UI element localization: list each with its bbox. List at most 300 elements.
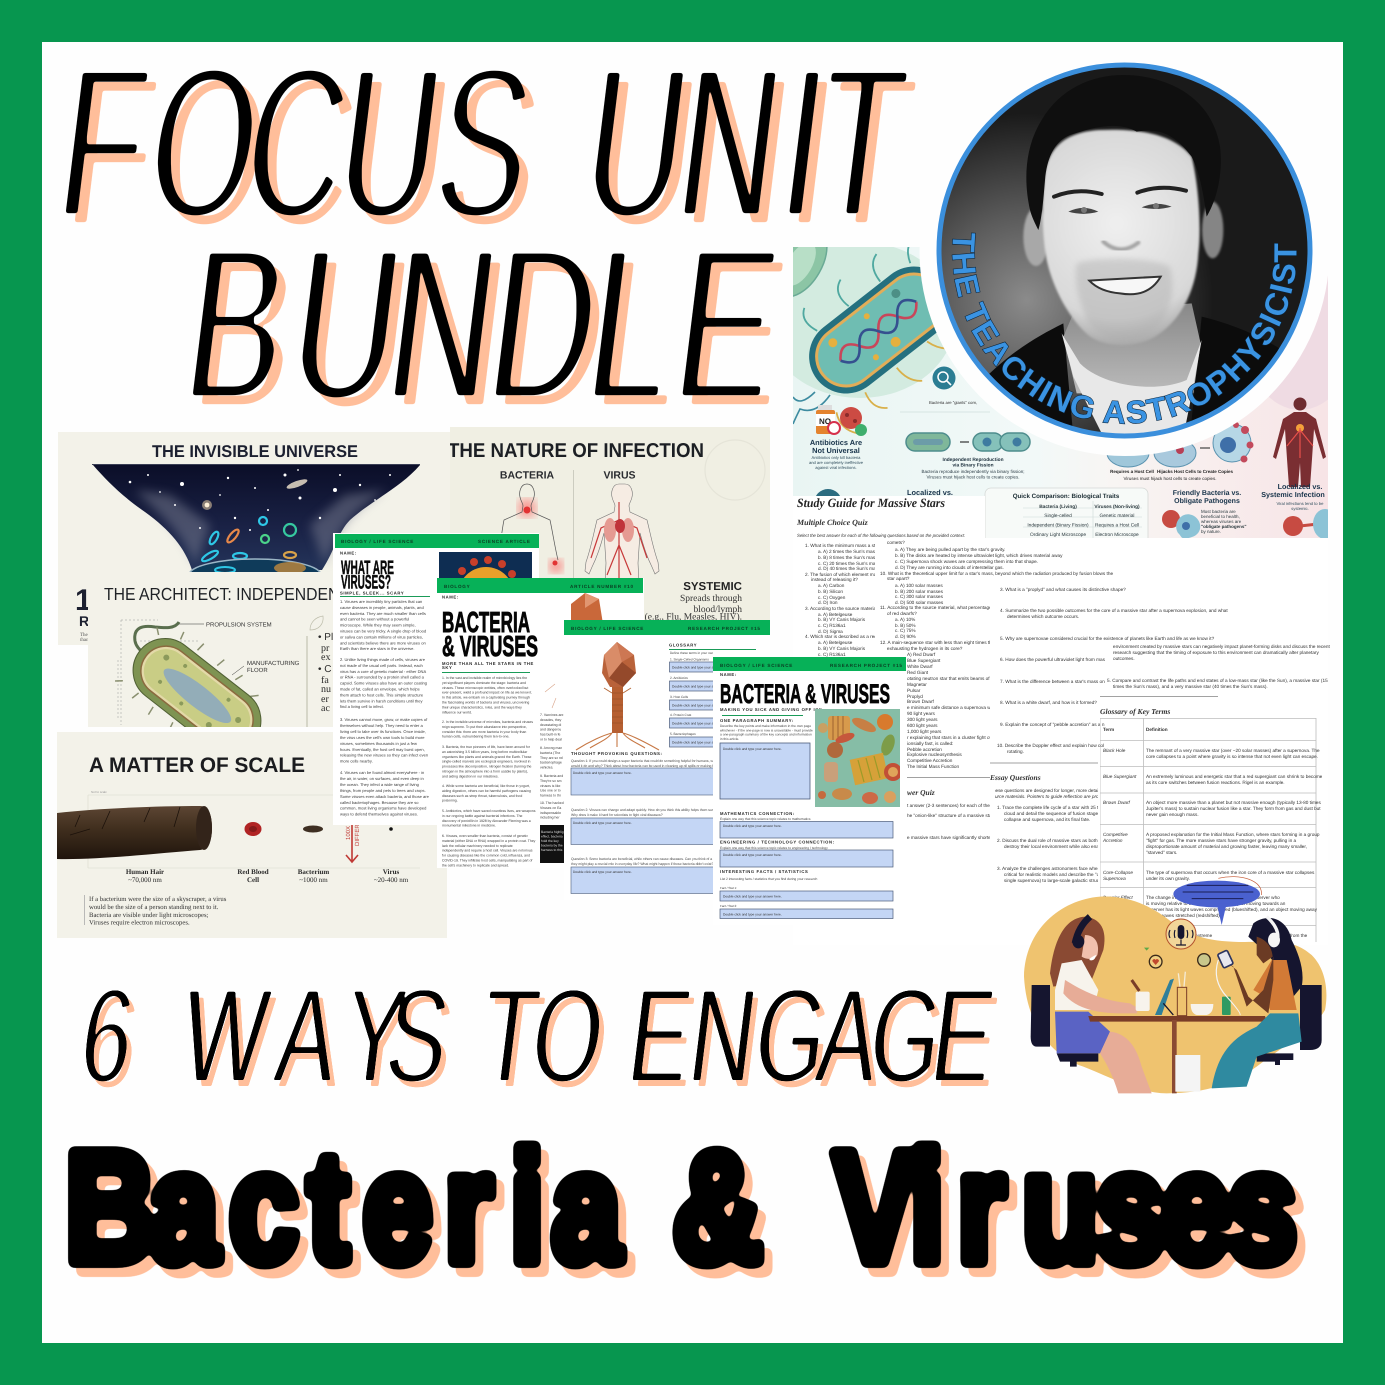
icon: small background bacterium [793, 247, 828, 297]
green header: BIOLOGY [444, 584, 470, 589]
quiz column 2 continued: c. C) 75% [895, 628, 916, 633]
note: would be the size of a person standing next to it. [89, 904, 219, 911]
quiz column 2 continued: r explaining that stars in a cluster fight ove [907, 735, 995, 740]
article body: human cells, outnumbering them ten-to-one. [442, 735, 509, 739]
quiz column 2 continued: 11. According to the source material, what percentage of [880, 605, 998, 610]
green header [564, 620, 770, 635]
article body: lack the cellular machinery needed to replicate [442, 844, 513, 848]
quiz column 1: d. D) 40 times the Sun's mass [818, 566, 881, 571]
glossary table: The change in a wave's frequency in relation to an observer who [1146, 895, 1280, 900]
article body: 2. In the invisible universe of microbes, bacteria and viruses [442, 720, 533, 724]
green header: BIOLOGY / LIFE SCIENCE [571, 626, 644, 631]
article body: 1. Viruses are incredibly tiny particles that can [340, 599, 422, 604]
quiz column 1: a. A) 2 times the Sun's mass [818, 549, 878, 554]
slide title: THE ARCHITECT: INDEPENDENT [104, 584, 349, 604]
poster text: reproduction: Independent Reproduction [942, 457, 1004, 463]
math section: Double click and type your answer here. [723, 824, 782, 828]
glossary answer boxes: Double click and type your answer here. [672, 684, 731, 688]
label: virus: Virus [383, 868, 400, 876]
eyes [1068, 203, 1172, 214]
glossary table: The type of supernova that occurs when the iron core of a massive star collapses [1146, 870, 1315, 875]
illustration: bacterium cell [115, 627, 262, 727]
article right column: indispensable [540, 811, 561, 815]
ears [1023, 207, 1049, 266]
icon: leaf [310, 616, 323, 630]
article right column: bacteria (The [540, 751, 560, 755]
bullets: ex [321, 652, 330, 663]
article body: their unique characteristics, roles, and the ways they [442, 705, 522, 709]
table: quick comparison: Ordinary Light Microscope [1030, 532, 1086, 538]
quiz column 1: 2. The fusion of which element mark [805, 572, 881, 577]
essay questions heading: Essay Questions [989, 773, 1041, 782]
poster text: host cell [1110, 469, 1234, 481]
nose [1103, 242, 1138, 249]
article body: them attach to host cells. This simple structure [340, 692, 424, 697]
glossary table [1100, 718, 1323, 945]
glossary answer boxes: Double click and type your answer here. [672, 722, 731, 726]
article body: find a living cell to infect. [340, 704, 384, 709]
table: quick comparison: Quick Comparison: Biological Traits [1013, 493, 1120, 500]
article right column: and dangerou [540, 728, 561, 732]
portrait badge: THE TEACHING ASTROPHYSICIST [952, 232, 1297, 424]
glossary table: core collapses to a point where gravity is so intense that not even light can escape. [1146, 754, 1318, 759]
thought provoking questions: Question 2: Viruses can change and adapt quickly. How do you think this ability helps them survive? [571, 808, 721, 812]
glossary table: A proposed explanation for the Initial Mass Function, where stars forming in a group [1146, 832, 1320, 837]
icon: teal circle [816, 489, 840, 496]
thought provoking questions: Double click and type your answer here. [573, 821, 632, 825]
engineering section: ENGINEERING / TECHNOLOGY CONNECTION: [720, 840, 835, 844]
tablet [1155, 979, 1174, 1015]
article right column: bacteriophage [540, 761, 562, 765]
icon: magnifier [932, 366, 956, 390]
glossary table: Competitive [1103, 832, 1128, 837]
icon: antibiotics bottle and virus [816, 405, 867, 436]
article right column: including her [540, 816, 560, 820]
poster heading: localized vs systemic: Systemic Infection [1261, 490, 1325, 499]
panel: bacteria vs viruses infographic poster: by nature. [1201, 529, 1221, 534]
glossary heading: GLOSSARY [669, 642, 697, 648]
quiz column 2 continued: b. B) 50% [895, 623, 916, 628]
quiz column 2 continued: he "onion-like" structure of a massive star [907, 813, 994, 818]
article body: releasing the new viruses so they can infect even [340, 753, 428, 758]
illustration: virus dot [389, 827, 393, 831]
article right column: 8. Among man [540, 746, 562, 750]
bag [1175, 1055, 1200, 1092]
panel: bacteria vs viruses infographic poster: Viruses must hijack host cells to create copies. [927, 474, 1019, 480]
green header: ARTICLE NUMBER #10 [570, 584, 634, 589]
article body: things, from people and pets to trees and crops. [340, 788, 426, 793]
article title: WHAT ARE [341, 557, 394, 579]
short answer questions: 5. Why are supernovae considered crucial for the existence of planets like Earth and life as we know it? [1000, 636, 1215, 641]
quiz column 2: 10. What is the theoretical upper limit for a star's mass, beyond which the radiation produced by fusion blows the [880, 571, 1113, 576]
article body: the virus uses the cell's own tools to build more [340, 735, 425, 740]
short answer questions clipped: 6. How does the powerful ultraviolet light from mas [1000, 657, 1106, 662]
face [1043, 130, 1200, 345]
glossary table: Core-Collapse [1103, 870, 1133, 875]
article subtitle: SKY [442, 665, 452, 670]
slide decoration [705, 440, 765, 500]
label: manufacturing: MANUFACTURING [247, 660, 300, 667]
label: red blood cell: Red Blood [237, 868, 269, 876]
glossary table: A supernova where the extreme [1146, 933, 1213, 938]
quiz column 2 continued: Explosive nucleosynthesis [907, 752, 962, 757]
short answer questions [1000, 587, 1228, 641]
illustration: cosmic funnel [93, 465, 420, 570]
title: Bacteria & Viruses: Bacteria & Viruses [65, 1120, 1298, 1296]
article body: common, most living organisms have developed [340, 806, 426, 811]
title: FOCUS UNIT: FOCUS UNIT [48, 22, 916, 263]
label: bacterium: ~1000 nm [299, 876, 328, 884]
essay questions: 2. Discuss the dual role of massive stars as both d [997, 838, 1102, 843]
green header [713, 657, 906, 671]
dark callout box [540, 825, 564, 863]
quiz column 2 continued: exhausting the hydrogen in its core? [887, 646, 963, 651]
label: manufacturing: FLOOR [247, 667, 268, 674]
label: red blood cell: Cell [247, 876, 259, 884]
article body: discovery of penicillin in 1928 by Alexander Fleming was a [442, 819, 531, 823]
chairs [1031, 985, 1050, 1047]
portrait photo [940, 67, 1308, 437]
poster heading: localized vs systemic: Localized vs. [1278, 482, 1322, 491]
thought provoking questions: THOUGHT PROVOKING QUESTIONS: [571, 751, 662, 756]
eyebrows [1054, 188, 1186, 197]
math section: Explain one way that this science topic relates to mathematics [720, 817, 811, 821]
article body: living cell to take over its functions. Once inside, [340, 729, 426, 734]
article body: single-celled marvels are ecological engineers, involved in [442, 760, 531, 764]
illustration: petri dish [189, 558, 321, 572]
label: bacterium: Bacterium [298, 868, 329, 876]
nebula edge clouds [135, 490, 385, 565]
short answer questions: 3. What is a "proplyd" and what causes its distinctive shape? [1000, 587, 1126, 592]
podcast illustration [1024, 877, 1326, 1093]
facts section: Fact / Stat 1: [720, 886, 737, 890]
icon: virus and cell [1283, 509, 1328, 538]
glossary table: "starved" stars. [1146, 850, 1177, 855]
article body: viruses. These microscopic entities, often overlooked but [442, 686, 528, 690]
jacket [970, 317, 1287, 437]
article right column: devastating di [540, 723, 561, 727]
quiz column 2 continued: 1,000 light years [907, 729, 942, 734]
bullets: pr [321, 643, 330, 654]
article body: Earth than there are stars in the universe. [340, 646, 414, 651]
quiz column 2 continued: Competitive Accretion [907, 758, 953, 763]
callout: systemic: blood/lymph [693, 605, 742, 615]
panel: bacteria vs viruses infographic poster: Bacteria are "giants" com, [929, 400, 977, 405]
column heading: bacteria: BACTERIA [500, 470, 555, 482]
quiz column 2 [880, 540, 1113, 576]
facts section: INTERESTING FACTS / STATISTICS [720, 869, 808, 874]
panel: research project worksheet 2: in this article. [720, 737, 739, 741]
panel: research project worksheet 2: MAKING YOU SICK AND GIVING OFF ICK [720, 707, 823, 712]
note: If a bacterium were the size of a skyscraper, a virus [89, 896, 227, 903]
panel: what are viruses article: NAME: [340, 550, 357, 556]
bullets: • Pl [318, 632, 333, 643]
facts section: Double click and type your answer here. [723, 912, 782, 916]
quiz column 1: b. B) VY Canis Majoris [818, 617, 866, 622]
article body: 2. Unlike living things made of cells, viruses are [340, 657, 426, 662]
quiz column 1: instead of releasing it? [811, 577, 858, 582]
glossary answer boxes: 1. Single-Celled Organisms [670, 658, 709, 662]
woman left [1050, 917, 1152, 1093]
article body: viruses can be very tricky. A single drop of blood [340, 628, 426, 634]
article body: and cannot be seen without a powerful [340, 617, 409, 622]
quiz column 2 continued: star apart? [887, 576, 910, 581]
quiz column 2 continued: c. C) 300 solar masses [895, 594, 944, 599]
thought provoking questions: Why does it make it hard for scientists to fight viral diseases? [571, 813, 663, 817]
quiz column 1: 3. According to the source material, [805, 606, 878, 611]
illustration: difference arrow [345, 800, 361, 862]
essay questions: source materials. Pointers to guide reflection are provi [990, 794, 1103, 799]
essay continuation block: research suggesting that the timing of exposure to this environment can dramatically alter planetary [1113, 650, 1319, 655]
article right column: 9. Bacteria and [540, 774, 563, 778]
article title: VIRUSES? [341, 572, 391, 594]
bullets: nu [321, 684, 331, 695]
glossary table: under its own gravity. [1146, 876, 1190, 881]
engineering section: Explain one way that this science topic relates to engineering / technology [720, 846, 828, 850]
article body: cause diseases in people, animals, plants, and [340, 605, 424, 610]
article body: 3. Bacteria, the true pioneers of life, have been around for [442, 745, 531, 749]
article subtitle: MORE THAN ALL THE STARS IN THE [442, 661, 534, 666]
green header: BIOLOGY / LIFE SCIENCE [341, 539, 414, 544]
essay continuation block: times the Sun's mass), and a very massive star (40 times the Sun's mass). [1113, 684, 1268, 689]
short answer questions clipped: 7. What is the difference between a star's mass on [1000, 679, 1105, 684]
quiz column 2 continued: 300 light years [907, 717, 938, 722]
bullets [318, 632, 333, 714]
article body: aiding digestion, others can be harmful pathogens causing [442, 789, 531, 793]
glossary answer boxes [670, 651, 731, 747]
article right column: They're so sm [540, 779, 562, 783]
smile [1089, 277, 1161, 294]
panel: bacteria vs viruses infographic poster [793, 247, 1328, 538]
glossary answer boxes: 2. Antibiotics [670, 676, 688, 680]
speech bubble [1173, 877, 1261, 925]
panel: what are viruses article: SIMPLE, SLEEK... SCARY [340, 590, 404, 596]
panel: invisible universe slide: The [80, 632, 89, 638]
note: Bacteria are visible under light microscopes; [89, 912, 209, 919]
dark callout box: effect, bacteria [541, 834, 563, 838]
quiz column 2 continued: White Dwarf [907, 664, 933, 669]
article body: hours. Eventually, the host cell may burst open, [340, 747, 425, 752]
thought provoking questions: they might play a crucial role in everyday life? What might happen if these bacteria didn't exist? [571, 862, 713, 866]
quiz column 2 continued: t answer (2-3 sentences) for each of the fo [907, 803, 995, 808]
quiz column 2 continued: e massive stars have significantly shorter [907, 835, 993, 840]
quiz column 2 continued: A) Red Dwarf [907, 652, 936, 657]
glossary table: Supernova [1103, 876, 1126, 881]
short answer questions: determines which outcome occurs. [1007, 614, 1079, 619]
article image: coronavirus [439, 552, 532, 623]
illustration: bacteriophage [576, 642, 659, 750]
quiz column 2 continued: 600 light years [907, 723, 938, 728]
essay questions: 1. Trace the complete life cycle of a star with 25 tim [997, 805, 1103, 810]
illustration: difference arrow: 100X [345, 826, 352, 840]
glossary table: Definition [1146, 727, 1168, 732]
article body: not made of the usual cell parts. Instead, each [340, 663, 423, 668]
drink [1222, 997, 1231, 1015]
article body: influence our world. [442, 710, 472, 714]
poster text: host cell: Requires a Host Cell [1110, 469, 1154, 474]
facts section: Fact / Stat 2: [720, 904, 737, 908]
article body: virus has a core of genetic material - either DNA [340, 669, 426, 674]
diagram: virus body [585, 484, 659, 583]
quiz column 1: 4. Which star is described as a red [805, 634, 877, 639]
quiz column 2 continued: a. A) 100 solar masses [895, 583, 943, 588]
multiple choice heading: Multiple Choice Quiz [796, 518, 869, 527]
quiz column 1: b. B) VY Canis Majoris [818, 646, 866, 651]
glossary table: Brown Dwarf [1103, 800, 1131, 805]
glossary table: from the [1290, 933, 1308, 938]
panel: bacteria vs viruses infographic poster: systemic. [1291, 506, 1309, 511]
quiz column 2 continued: Magnetar [907, 682, 927, 687]
glossary answer boxes: 5. Bacteriophages [670, 732, 696, 736]
green header [437, 578, 643, 593]
dimension lines [118, 620, 200, 725]
quiz column 1: 1. What is the minimum mass a star [805, 543, 880, 548]
illustration: red blood cell [244, 822, 262, 836]
quiz column 2 continued: d. D) 90% [895, 634, 916, 639]
article body: ever-present, wield a profound impact on life as we know it. [442, 691, 532, 695]
quiz column 2 continued: 90 light years [907, 711, 936, 716]
article body [340, 599, 430, 817]
panel: bacteria vs viruses infographic poster: and are completely ineffective [809, 460, 864, 465]
note [84, 895, 227, 926]
label: virus: ~20-400 nm [374, 876, 409, 884]
article body: 3. Viruses cannot move, grow, or make copies of [340, 717, 428, 722]
illustration: flagellum [133, 621, 180, 651]
quiz column 2 continued: Pulsar [907, 688, 921, 693]
engineering section: Double click and type your answer here. [723, 853, 782, 857]
math section: MATHEMATICS CONNECTION: [720, 811, 795, 816]
essay questions [995, 788, 1098, 883]
icon: binary fission [906, 433, 1030, 451]
quiz column 1: c. C) R136a1 [818, 652, 846, 657]
table [1088, 1016, 1266, 1022]
badge ring [939, 65, 1310, 436]
facts section: Double click and type your answer here. [723, 894, 782, 898]
essay questions: These questions are designed for longer, more detailed [990, 788, 1105, 793]
article body: in our ongoing battle against bacterial infections. The [442, 814, 522, 818]
article body: consider this: there are more bacteria in your body than [442, 730, 526, 734]
glossary answer boxes: 4. Protein Coat [670, 713, 691, 717]
poster heading: friendly bacteria: Friendly Bacteria vs. [1173, 489, 1241, 497]
note: Viruses require electron microscopes. [89, 920, 190, 926]
glass [1177, 972, 1187, 1016]
article right column: Use one or to [540, 789, 561, 793]
panel: what are viruses article [333, 533, 539, 825]
panel: bacteria vs viruses infographic poster: Not Universal [812, 446, 860, 455]
quiz column 1: d. D) Sigma [818, 629, 843, 634]
glossary table: Term [1103, 727, 1114, 732]
icons: reactions [1144, 948, 1210, 968]
panel: bacteria vs viruses infographic poster: whereas viruses are [1201, 519, 1242, 524]
callout: systemic [645, 581, 742, 622]
stubble [1076, 259, 1172, 341]
article body: or RNA - surrounded by a protein shell called a [340, 675, 425, 680]
illustration: human hair [57, 806, 212, 859]
quiz column 1: d. D) Iron [818, 600, 838, 605]
dark callout box: hold the key [541, 839, 559, 843]
thought provoking questions [571, 751, 721, 894]
worksheet title: BACTERIA & VIRUSES [720, 679, 890, 709]
bullets: er [321, 694, 329, 705]
short answer questions: 4. Summarize the two possible outcomes for the core of a massive star after a supernova explosion, and what [1000, 608, 1228, 613]
article body: poisoning. [442, 799, 458, 803]
article body: capsid. Some viruses also have an outer coating [340, 681, 427, 686]
illustration: difference arrow: DIFFER [354, 824, 361, 846]
panel: bacteria and viruses article: NAME: [442, 594, 459, 600]
facts section: List 2 interesting facts / statistics that you find during your research [720, 877, 817, 881]
article right column [540, 684, 564, 863]
glossary table: disproportionate amount of material and growing faster, leaving many smaller, [1146, 844, 1307, 849]
icon: host cells [1107, 422, 1254, 467]
article body: material (either DNA or RNA) wrapped in a protein coat. They [442, 839, 536, 843]
article body: the cell's machinery to replicate and spread. [442, 863, 509, 867]
cup [1132, 980, 1150, 1011]
panel: bacteria vs viruses infographic poster: Most bacteria are [1201, 509, 1236, 514]
bowl [1191, 1004, 1213, 1015]
bullets: ac [321, 703, 330, 714]
article body: lets them survive in harsh conditions until they [340, 698, 424, 703]
article body: Some viruses even attack bacteria, and those are [340, 794, 430, 799]
panel: bacteria vs viruses infographic poster: "obligate pathogens" [1201, 524, 1247, 529]
photo halo [920, 46, 1330, 456]
panel: bacteria vs viruses infographic poster: Viral infections tend to be [1277, 501, 1324, 506]
glossary answer boxes: Double click and type your answer here. [672, 666, 731, 670]
summary heading: ONE PARAGRAPH SUMMARY: [720, 718, 794, 723]
shirt [1062, 333, 1202, 437]
quiz column 1: a. A) Betelgeuse [818, 640, 853, 645]
germs [201, 517, 296, 563]
quiz column 2 continued: e minimum safe distance a supernova wou [907, 705, 996, 710]
callout: systemic: Spreads through [680, 594, 742, 604]
icon: microphone [1166, 919, 1196, 949]
panel: a matter of scale slide: Not to scale [91, 790, 107, 794]
quiz column 2 continued: otating neutron star that emits beams of X [907, 676, 995, 681]
flagella [793, 392, 830, 424]
portrait badge [936, 62, 1312, 438]
article body: the ocean. They infect a wide range of living [340, 782, 419, 787]
article body: 6. Viruses, even smaller than bacteria, consist of genetic [442, 834, 528, 838]
article right column: 7. Vaccines are [540, 713, 564, 717]
panel: invisible universe slide: R [79, 613, 89, 629]
poster text: host cell: Hijacks Host Cells to Create Copies [1157, 469, 1234, 474]
panel: research project worksheet 2: a one-paragraph summary of the key concepts and information [720, 733, 812, 737]
essay continuation block [1107, 644, 1330, 689]
table: quick comparison: Independent (Binary Fission) [1027, 522, 1089, 528]
article body: 4. Viruses can be found almost everywhere - in [340, 770, 424, 775]
essay questions: critical for realistic models and describe the "one [1004, 872, 1105, 877]
label: hair: ~70,000 nm [128, 876, 162, 884]
glossary table: is moving relative to the wave source. An object moving towards an [1146, 901, 1286, 906]
quiz column 1: b. B) Silicon [818, 589, 843, 594]
article body: diseases such as strep throat, tuberculosis, and food [442, 794, 522, 798]
quiz column 2 continued: Blue Supergiant [907, 658, 941, 663]
icon: large bacterium with DNA [802, 247, 945, 434]
quiz column 2: b. B) The disks are heated by intense ultraviolet light, which drives material away [895, 553, 1063, 558]
quiz column 2 continued: Pebble accretion [907, 747, 942, 752]
label: hair: Human Hair [126, 868, 164, 876]
article body: more cells nearby. [340, 759, 373, 764]
table: quick comparison: Genetic material [1100, 513, 1134, 519]
essay questions: single supernova) to large-scale galactic structu [1004, 878, 1103, 883]
article body: the air, in water, on surfaces, and even deep in [340, 776, 424, 781]
article image: phage head [571, 593, 603, 624]
math section [720, 811, 893, 838]
quiz column 1: a. A) Betelgeuse [818, 612, 853, 617]
glossary table: as its core switches between fusion reactions. Rigel is an example. [1146, 780, 1285, 785]
study guide title: Study Guide for Massive Stars [797, 496, 945, 510]
article body: 1. In the vast and invisible realm of microbiology lies the [442, 676, 527, 680]
quiz column 2: c. C) Supernova shock waves are compressing them into that shape. [895, 559, 1038, 564]
